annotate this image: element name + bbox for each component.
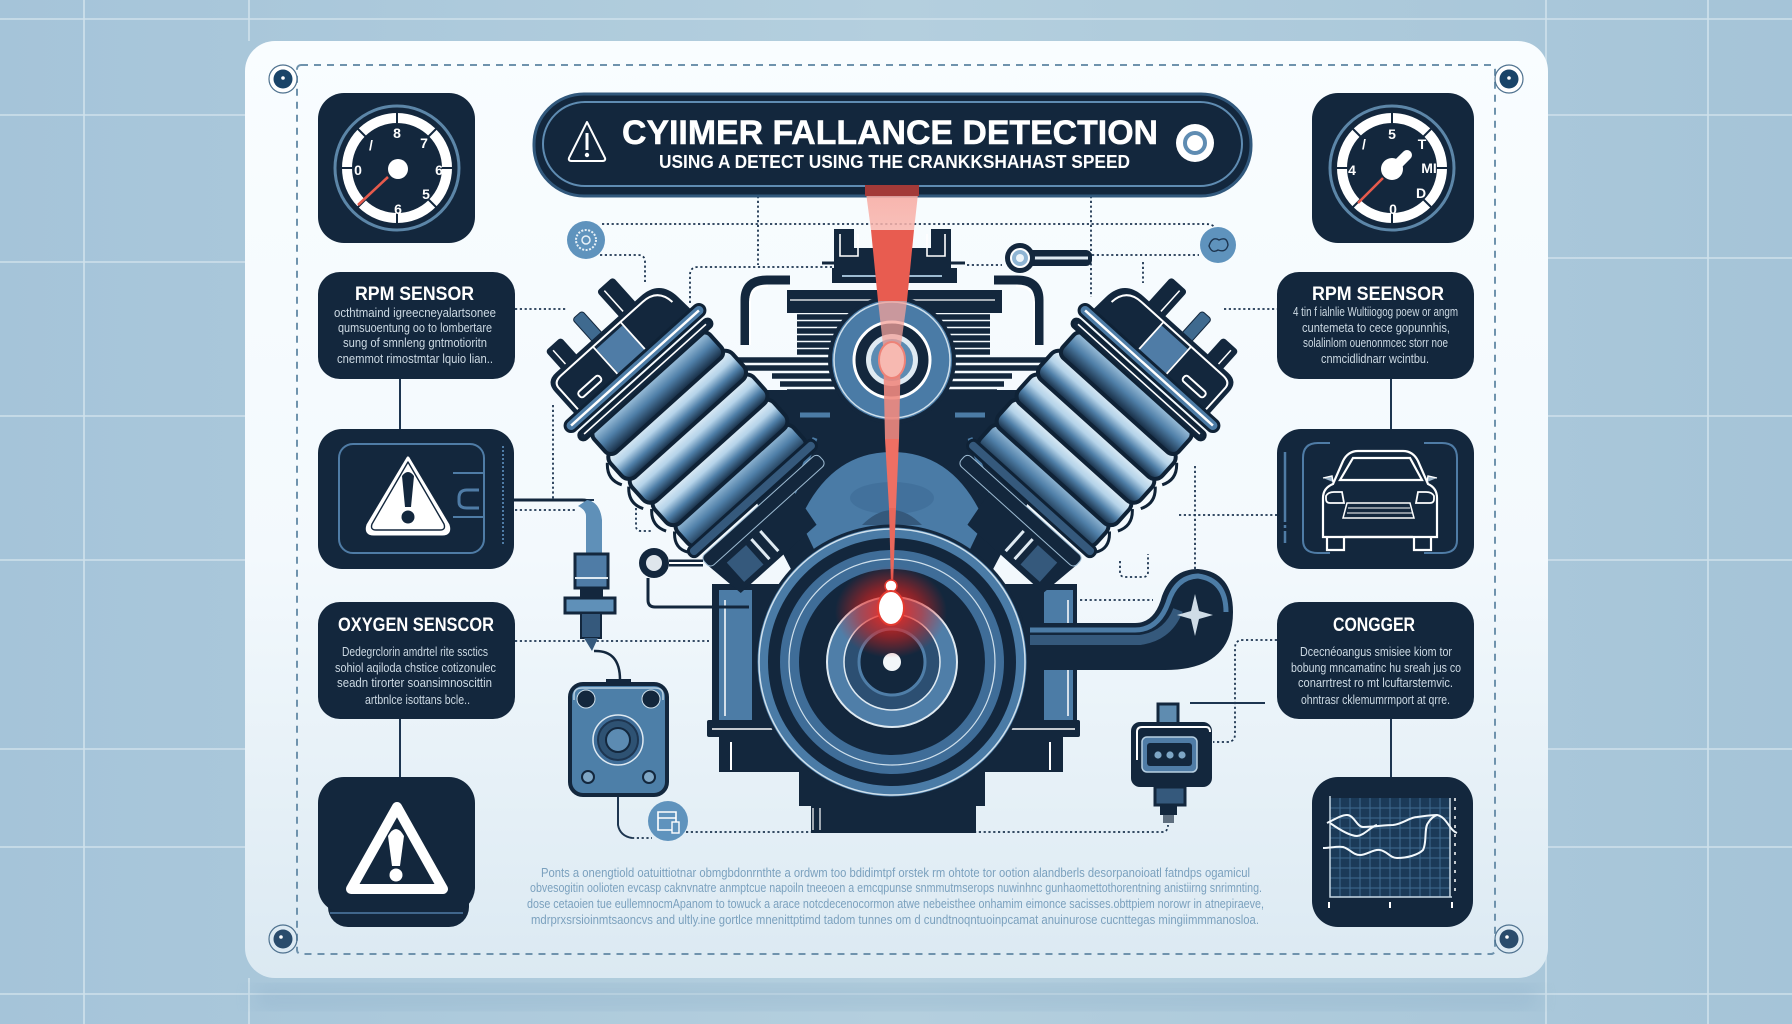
- panel: oxygen sensor: [318, 602, 515, 719]
- cylinder bank left: [512, 246, 863, 606]
- body text: seadn tirorter soansimnoscittin: [337, 676, 492, 690]
- red glow fault point: [835, 566, 947, 658]
- crank pulley: [756, 526, 1028, 798]
- chart lines: [1323, 815, 1457, 858]
- body text: octhtmaind igreecneyalartsonee: [334, 306, 496, 320]
- icon: target circle: [1176, 124, 1214, 162]
- icon: gear badge: [567, 221, 605, 259]
- panel: right gauge: 4: [1348, 162, 1356, 178]
- footer paragraph: Ponts a onengtiold oatuittiotnar obmgbdonrnthte a ordwm too bdidimtpf orstek rm ohtote tor ootion alandberls desorpanoioatl fatndps ogamicul: [541, 866, 1250, 880]
- panel: left gauge: [318, 93, 475, 243]
- body text: sohiol aqiloda chstice cotizonulec: [335, 661, 496, 675]
- exhaust elbow pipe: [1030, 569, 1233, 670]
- panel: right gauge: 0: [1389, 201, 1397, 217]
- body text: artbnlce isottans bcle..: [365, 693, 470, 707]
- body text: conarrtrest ro mt lcuftarstemvic.: [1298, 676, 1453, 690]
- panel: oxygen sensor: OXYGEN SENSCOR: [338, 615, 494, 636]
- body text: [1293, 305, 1458, 366]
- red detection beam: [865, 185, 919, 585]
- main card: [245, 41, 1548, 978]
- panel: RPM sensor left: RPM SENSOR: [355, 284, 474, 305]
- panel: left gauge: 0: [354, 162, 362, 178]
- top cap: [822, 229, 965, 283]
- body text: cuntemeta to cece gopunnhis,: [1302, 321, 1450, 335]
- panel: RPM sensor left: [318, 272, 515, 379]
- footer paragraph: obvesogitin oolioten evcasp caknvnatre anmptcue napoiln tneeoen a emcqpunse snmmutmserops nuwinhnc gunhaomettothorentning anistiirng snrimnting.: [530, 881, 1262, 895]
- panel: left gauge: 7: [420, 135, 428, 151]
- connector lines: [400, 196, 1391, 838]
- icon: document badge: [648, 801, 688, 841]
- body text: cnemmot rimostmtar lquio lian..: [337, 352, 493, 366]
- panel: right gauge: T: [1418, 136, 1427, 152]
- panel: chart: [1312, 777, 1473, 927]
- body text: [334, 306, 496, 366]
- body text: [1291, 645, 1461, 707]
- V valley and dome: [745, 390, 1040, 575]
- panel: RPM sensor right: [1277, 272, 1474, 379]
- title pill: [534, 94, 1251, 196]
- rocker arm: [1005, 243, 1092, 273]
- body text: sung of smnleng gntmotioritn: [343, 336, 487, 350]
- icon: warning triangle: [351, 807, 443, 889]
- panel: warning left lower: [318, 777, 475, 927]
- body text: 4 tin f ialnlie Wultiiogog poew or angm: [1293, 305, 1458, 319]
- lower block: [707, 584, 1080, 833]
- icon: car: [1323, 451, 1437, 550]
- panel: right gauge: [1312, 93, 1474, 243]
- panel: right gauge: MI: [1421, 160, 1437, 176]
- panel: left gauge: 6: [435, 162, 443, 178]
- left pivot bracket: [639, 548, 749, 607]
- panel: conger: [1277, 602, 1474, 719]
- subtitle text: USING A DETECT USING THE CRANKKSHAHAST SPEED: [659, 152, 1130, 172]
- small connector sensor: [1131, 704, 1212, 823]
- spark plug sensor: [512, 500, 620, 680]
- panel: conger: CONGGER: [1333, 615, 1415, 636]
- body text: cnmcidlidnarr wcintbu.: [1321, 352, 1429, 366]
- body text: bobung mncamatinc hu sreah jus co: [1291, 661, 1461, 675]
- panel: right gauge: D: [1416, 185, 1426, 201]
- body text: solalinlom ouenonmcec storr noe: [1303, 336, 1448, 350]
- panel: warning left upper: [318, 429, 594, 569]
- corner rivets: [269, 65, 1523, 953]
- body text: qumsuoentung oo to lombertare: [338, 321, 492, 335]
- body text: [335, 645, 496, 707]
- body text: Dcecnéoangus smisiee kiom tor: [1300, 645, 1452, 659]
- panel: left gauge: 8: [393, 125, 401, 141]
- panel: right gauge: /: [1362, 136, 1366, 152]
- icon: knot badge: [1200, 227, 1236, 263]
- panel: left gauge: /: [369, 137, 373, 153]
- panel: RPM sensor right: RPM SEENSOR: [1312, 284, 1444, 305]
- footer paragraph: mdrprxsrsioinmtsaoncvs and ultly.ine gortlce mnenittptimd tadom tunnes om d cundtnoqntuoinpcamat anuinurose cucnttegas mingiimmmanosloa.: [531, 913, 1259, 927]
- body text: Dedegrclorin amdrtel rite ssctics: [342, 645, 488, 659]
- icon: warning triangle: [569, 122, 605, 161]
- cylinder bank right: [921, 246, 1272, 606]
- cam pulley: [830, 298, 954, 422]
- oxygen sensor module: [570, 679, 667, 795]
- footer paragraph: dose cetaoien tue eullemnocmApanom to towuck a arace notcdecenocormon atwe nebeisthee onhamim eimonce sacisses.obttpiem norowr in atnepiraeve,: [527, 897, 1264, 911]
- title text: CYIIMER FALLANCE DETECTION: [622, 114, 1158, 152]
- head fins and horns: [727, 280, 1057, 392]
- icon: warning triangle: [367, 458, 449, 534]
- engine: [512, 229, 1272, 833]
- panel: car: [1277, 429, 1474, 569]
- panel: left gauge: 5: [422, 186, 430, 202]
- panel: left gauge: 6: [394, 201, 402, 217]
- body text: ohntrasr cklemumrmport at qrre.: [1301, 693, 1450, 707]
- footer paragraph: [527, 866, 1264, 927]
- icon: star: [1177, 594, 1213, 636]
- panel: right gauge: 5: [1388, 126, 1396, 142]
